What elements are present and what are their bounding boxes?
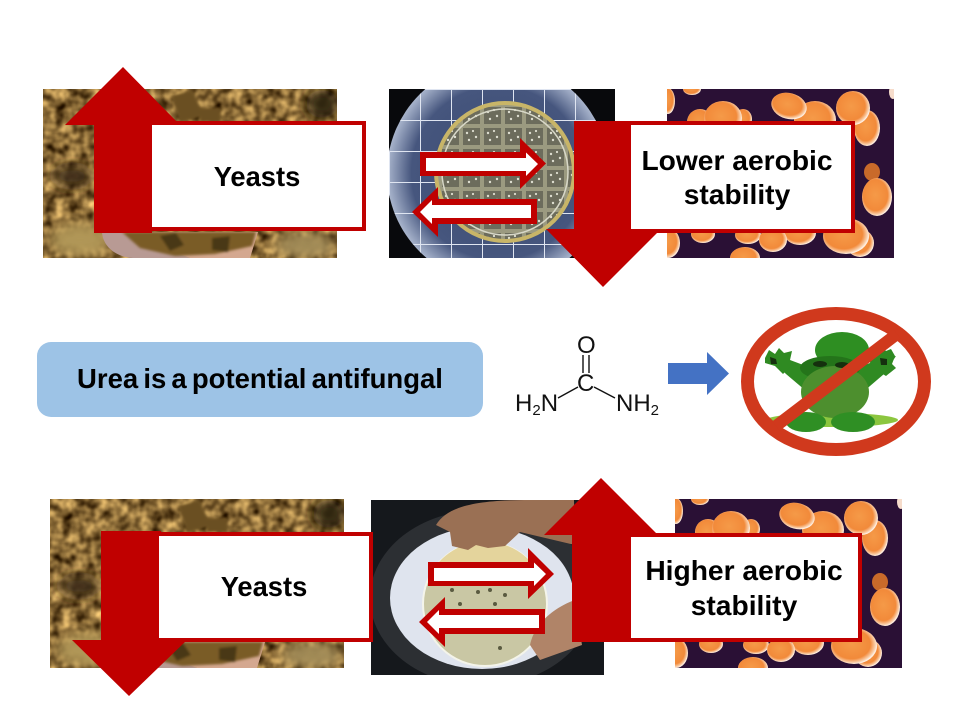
icon: red down arrow [72,531,187,696]
label: lower aerobic stability: stability [684,178,791,210]
icon: green frog-like fungus [765,332,898,432]
panel: bottom scenario, urea present [50,478,905,696]
diagram: urea chemical structure: H [515,390,532,417]
heading: urea is a potential antifungal [37,342,483,417]
diagram: urea chemical structure: NH [616,390,651,417]
image: hand holding petri dish over light [370,500,604,686]
icon: red down arrow [546,121,661,287]
callout: yeasts decrease [72,531,371,696]
arrow: right exchange arrow [428,548,554,599]
diagram: urea chemical structure: C [577,370,594,397]
icon: no fungus prohibition sign [748,314,924,450]
image: silage held in hand [43,89,338,258]
label: higher aerobic stability: stability [691,589,798,621]
diagram: urea chemical structure [515,332,659,419]
arrow: left exchange arrow [419,597,545,647]
callout: yeasts increase [65,67,364,233]
callout: higher aerobic stability [544,478,860,642]
diagram: urea chemical structure: N [541,390,558,417]
label: higher aerobic stability: Higher aerobic [645,554,843,586]
label: yeasts: Yeasts [221,571,307,602]
image: silage held in hand [50,499,345,668]
callout: lower aerobic stability [546,121,853,287]
diagram: urea chemical structure: 2 [651,402,659,419]
diagram: urea chemical structure: O [577,332,596,359]
image: yeast cells micrograph [664,493,905,679]
arrow: right exchange arrow [420,138,546,189]
diagram: urea chemical structure: 2 [532,402,541,419]
image: yeast cells micrograph [656,83,897,269]
heading: urea is a potential antifungal: Urea is a potential antifungal [77,363,443,394]
arrow: blue right arrow [668,352,729,395]
label: lower aerobic stability: Lower aerobic [641,144,833,176]
arrow: left exchange arrow [412,187,537,237]
icon: red up arrow [65,67,180,233]
image: petri dish on colony counter grid [389,89,615,258]
label: yeasts: Yeasts [214,161,300,192]
icon: red up arrow [544,478,658,642]
panel: top scenario, urea absent [43,62,897,287]
